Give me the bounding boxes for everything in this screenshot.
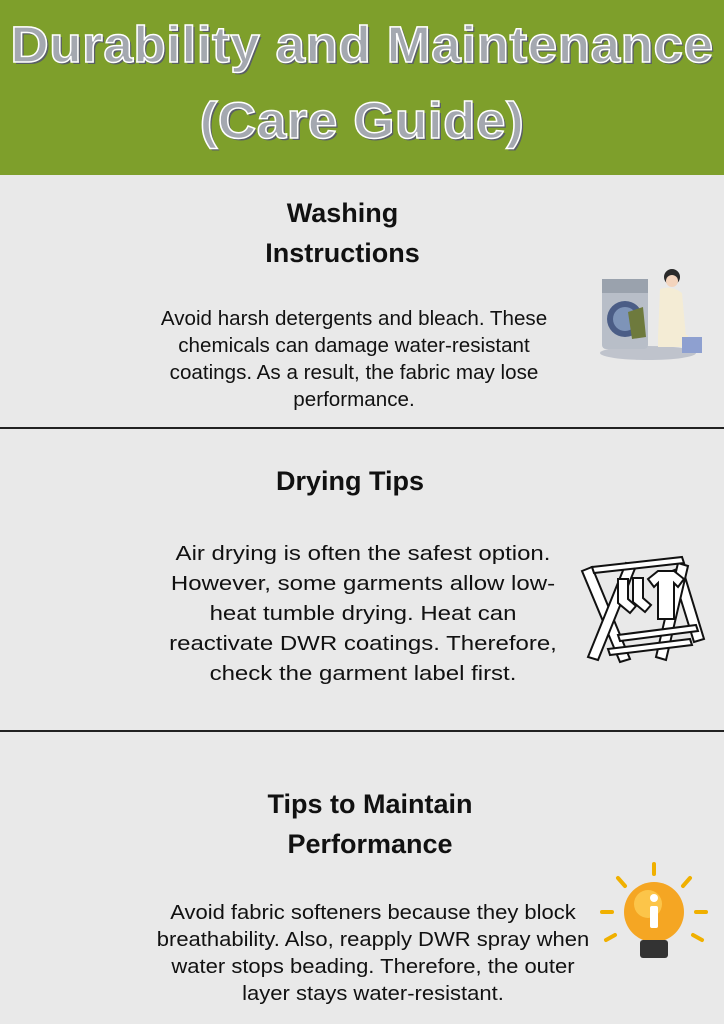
heading: tips to maintain performance	[267, 789, 472, 859]
title: Durability and Maintenance	[10, 16, 714, 73]
heading: washing instructions: Instructions	[265, 238, 420, 268]
text: maintain: Avoid fabric softeners because they block	[170, 902, 576, 924]
panel: drying	[169, 466, 706, 685]
text: maintain: layer stays water-resistant.	[242, 983, 504, 1005]
text: drying: check the garment label first.	[210, 663, 516, 685]
heading: washing instructions: Washing	[287, 198, 398, 228]
panel: maintain	[157, 789, 708, 1005]
panel: washing	[161, 198, 702, 411]
heading: washing instructions	[265, 198, 420, 268]
heading: tips to maintain performance: Tips to Maintain	[267, 789, 472, 819]
title: (Care Guide)	[200, 92, 524, 149]
icon: washing machine	[600, 269, 702, 360]
text: washing: coatings. As a result, the fabric may lose	[170, 362, 538, 384]
text: maintain: water stops beading. Therefore, the outer	[171, 956, 575, 978]
heading: tips to maintain performance: Performance	[287, 829, 453, 859]
text: maintain: breathability. Also, reapply DWR spray when	[157, 929, 589, 951]
text: washing	[161, 308, 547, 411]
text: drying: heat tumble drying. Heat can	[210, 603, 516, 625]
title	[10, 16, 714, 150]
heading: drying tips: Drying Tips	[276, 466, 424, 496]
text: maintain	[157, 902, 589, 1005]
header banner	[0, 0, 724, 175]
text: drying: However, some garments allow low-	[171, 573, 555, 595]
text: washing: Avoid harsh detergents and bleach. These	[161, 308, 547, 330]
text: drying: Air drying is often the safest option.	[176, 543, 550, 565]
icon: drying rack	[580, 556, 706, 664]
text: washing: chemicals can damage water-resistant	[178, 335, 530, 357]
text: drying	[169, 543, 557, 685]
text: drying: reactivate DWR coatings. Therefore,	[169, 633, 557, 655]
icon: light bulb	[600, 862, 708, 958]
text: washing: performance.	[293, 389, 415, 411]
